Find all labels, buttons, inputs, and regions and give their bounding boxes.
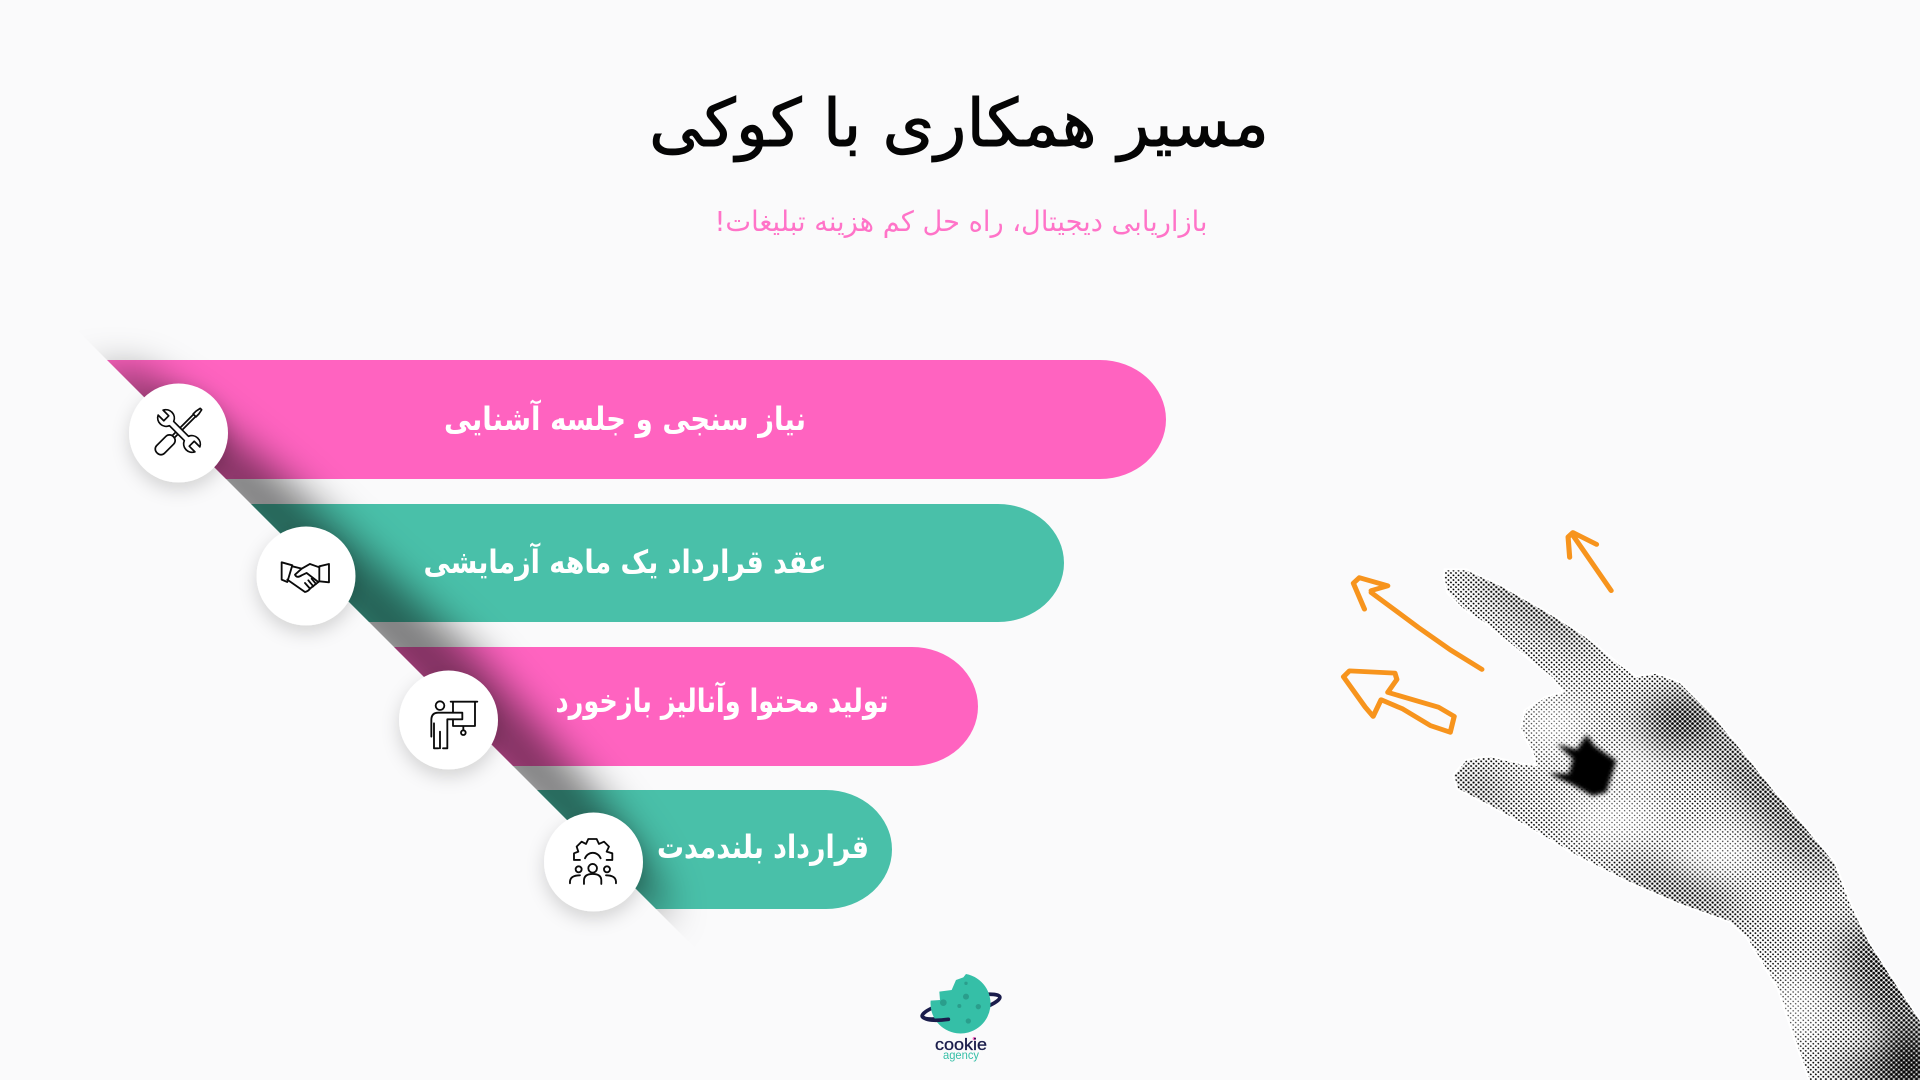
bar: step 3 pink <box>394 647 978 766</box>
icon: presenter at board <box>431 701 477 748</box>
panel: funnel steps <box>80 360 1166 920</box>
logo tagline: agency <box>943 1048 979 1062</box>
logo wordmark: cookie <box>935 1035 987 1054</box>
title: مسیر همکاری با کوکی <box>649 85 1269 162</box>
bar: step 2 teal <box>251 504 1064 622</box>
diagonal cast shadow <box>80 372 668 920</box>
circle badge 2 <box>256 526 356 626</box>
circle badge 1 <box>129 384 228 482</box>
subtitle: بازاریابی دیجیتال، راه حل کم هزینه تبلیغات! <box>714 205 1208 238</box>
step 1 label: نیاز سنجی و جلسه آشنایی <box>444 399 806 438</box>
arrow: outlined <box>1343 671 1454 732</box>
step 3 label: تولید محتوا وآنالیز بازخورد <box>556 681 888 720</box>
step 2 label: عقد قرارداد یک ماهه آزمایشی <box>424 542 826 581</box>
circle badge 4 <box>544 812 643 912</box>
icon: orange arrows <box>1343 533 1611 732</box>
logo: cookie agency <box>920 974 1002 1062</box>
icon: handshake <box>282 562 329 592</box>
icon: team with gear <box>570 839 616 884</box>
bar: step 4 teal <box>537 790 892 909</box>
step 4 label: قرارداد بلندمدت <box>657 828 869 866</box>
circle badge 3 <box>399 670 498 770</box>
arrow: middle <box>1353 578 1482 669</box>
illustration: halftone hand <box>1444 570 1920 1080</box>
bar: step 1 pink <box>107 360 1166 479</box>
icon: wrench and screwdriver <box>153 405 205 457</box>
logo planet <box>920 974 1002 1040</box>
arrow: top <box>1568 533 1611 591</box>
